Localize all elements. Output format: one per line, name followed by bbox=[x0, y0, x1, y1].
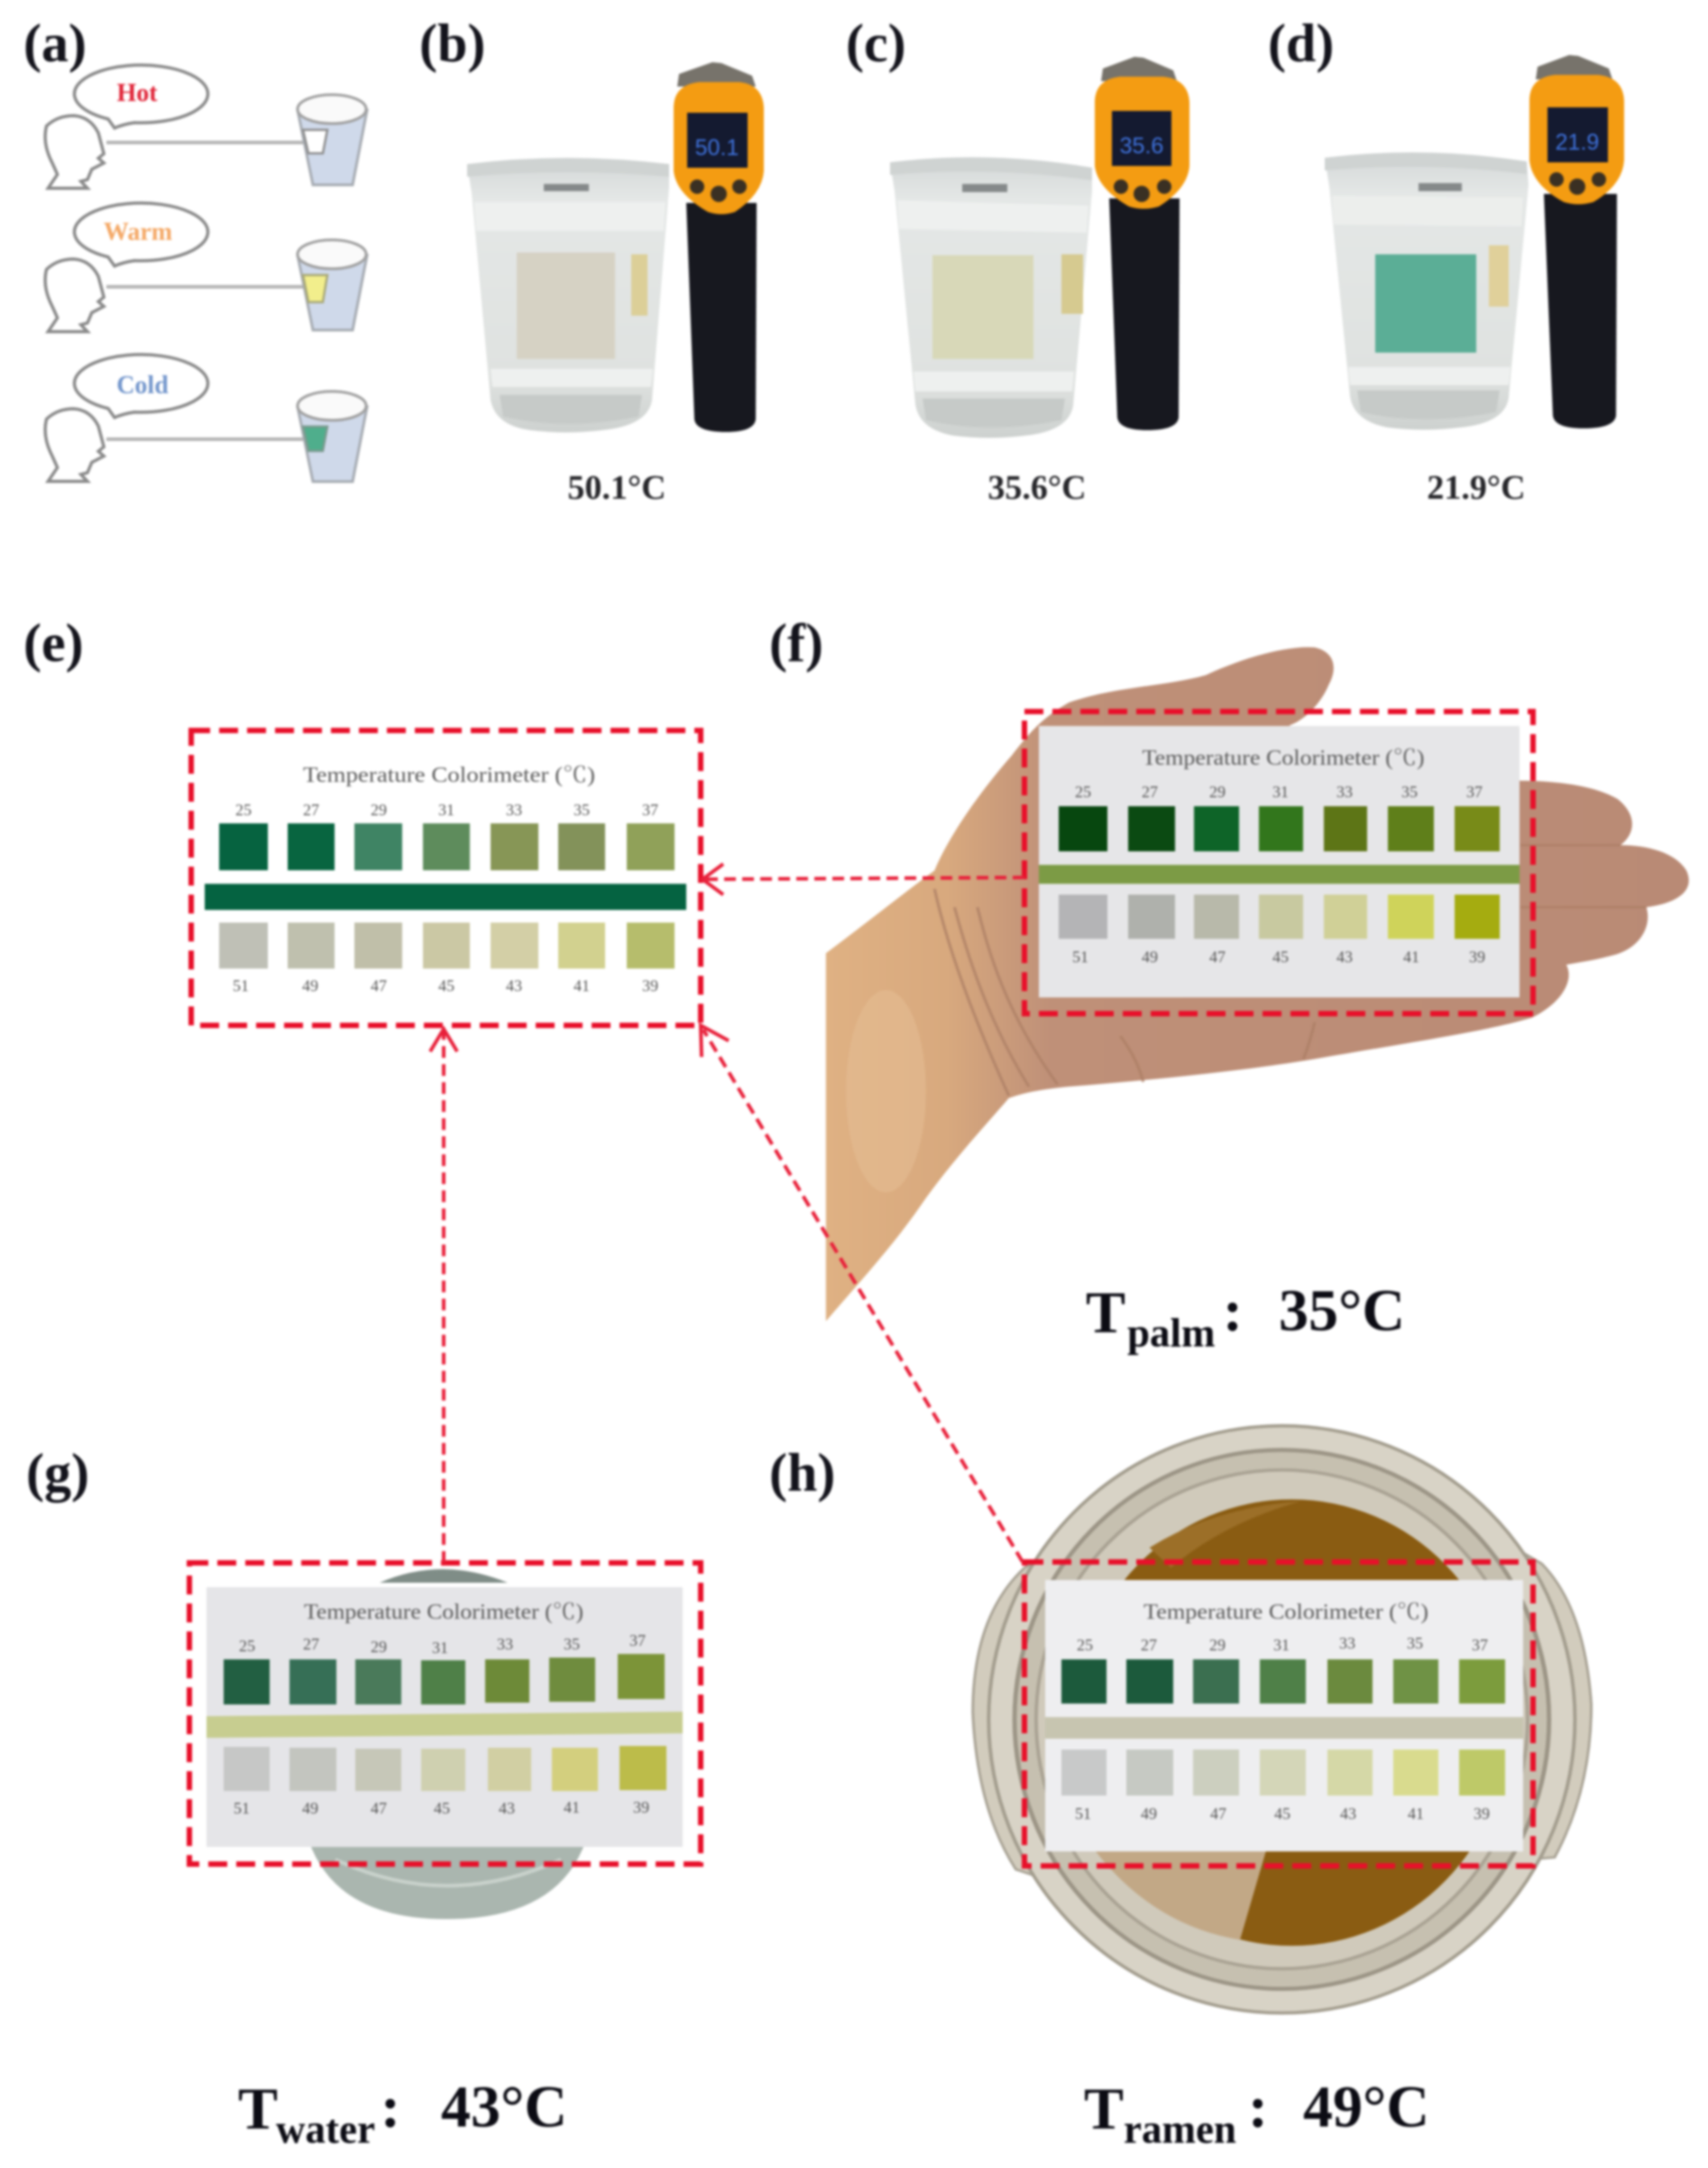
upper scale numbers bbox=[1075, 783, 1483, 801]
upper scale numbers: 29 bbox=[371, 801, 387, 819]
beaker with sensor card bbox=[890, 157, 1092, 438]
lower scale numbers: 49 bbox=[302, 1799, 318, 1817]
indicator strip bbox=[205, 884, 686, 910]
upper scale numbers bbox=[1077, 1634, 1488, 1654]
reading: ramen temperature: T bbox=[1084, 2076, 1124, 2142]
reading: water temperature: 43°C bbox=[441, 2074, 567, 2140]
temperature reading: 21.9°C bbox=[1427, 469, 1526, 507]
lower scale numbers: 41 bbox=[1403, 948, 1419, 966]
word: cold: Cold bbox=[116, 372, 169, 400]
photo: ramen bowl bbox=[973, 1426, 1592, 2013]
row: cold bbox=[45, 354, 367, 482]
upper scale numbers: 25 bbox=[1077, 1636, 1093, 1654]
upper scale numbers: 33 bbox=[506, 801, 522, 819]
indicator strip bbox=[1045, 1717, 1523, 1739]
dashed highlight box bbox=[1024, 712, 1533, 1014]
upper scale numbers: 25 bbox=[235, 801, 252, 819]
upper colour swatches bbox=[219, 823, 675, 870]
upper scale numbers: 27 bbox=[1141, 1636, 1157, 1654]
speech bubble: warm bbox=[75, 203, 208, 266]
upper scale numbers: 27 bbox=[303, 801, 319, 819]
lower scale numbers: 45 bbox=[434, 1799, 450, 1817]
lower scale numbers: 43 bbox=[506, 977, 522, 995]
temperature reading: 35.6°C bbox=[987, 469, 1087, 507]
dashed highlight box bbox=[1024, 1562, 1533, 1866]
upper scale numbers: 25 bbox=[1075, 783, 1091, 801]
lower scale numbers: 43 bbox=[1336, 948, 1353, 966]
lower scale numbers: 47 bbox=[1209, 948, 1226, 966]
lower scale numbers: 39 bbox=[642, 977, 658, 995]
upper scale numbers: 27 bbox=[303, 1635, 319, 1653]
upper scale numbers bbox=[239, 1631, 646, 1657]
label a: (a) bbox=[23, 14, 87, 73]
lower scale numbers bbox=[1075, 1805, 1490, 1823]
reading: ramen temperature: ramen bbox=[1124, 2107, 1236, 2152]
icon: cup with green swatch bbox=[298, 391, 367, 482]
arrow: ramen card to reference card bbox=[701, 1025, 1023, 1562]
word: hot: Hot bbox=[116, 79, 158, 107]
lower colour swatches bbox=[224, 1746, 666, 1791]
connecting line bbox=[106, 285, 303, 289]
card title: Temperature Colorimeter (℃) bbox=[1143, 1601, 1428, 1624]
lower scale numbers: 47 bbox=[371, 977, 387, 995]
upper scale numbers: 29 bbox=[1209, 1636, 1226, 1654]
upper scale numbers: 33 bbox=[1339, 1634, 1355, 1652]
icon: cup with yellow swatch bbox=[298, 240, 367, 330]
reading: palm temperature: palm bbox=[1127, 1310, 1216, 1355]
lower scale numbers: 45 bbox=[438, 977, 455, 995]
infrared thermometer: 35.6 bbox=[1120, 133, 1163, 159]
lower scale numbers bbox=[233, 977, 658, 995]
dashed highlight box bbox=[191, 730, 701, 1025]
photo: water dish bbox=[308, 1569, 586, 1919]
upper scale numbers: 35 bbox=[1401, 783, 1418, 801]
arrow: water card to reference card bbox=[430, 1029, 457, 1563]
infrared thermometer: 50.1 bbox=[695, 135, 739, 161]
upper scale numbers: 29 bbox=[1209, 783, 1226, 801]
arrow: palm card to reference card bbox=[702, 864, 1024, 895]
upper scale numbers: 25 bbox=[239, 1637, 255, 1655]
upper scale numbers bbox=[235, 801, 658, 819]
reading: palm temperature: T bbox=[1086, 1280, 1125, 1346]
reading: water temperature: water bbox=[276, 2107, 375, 2152]
beaker with sensor card bbox=[467, 158, 669, 433]
word: warm: Warm bbox=[104, 218, 172, 246]
upper scale numbers: 33 bbox=[1336, 783, 1353, 801]
reading: palm temperature bbox=[1086, 1278, 1405, 1355]
lower scale numbers: 47 bbox=[371, 1799, 387, 1817]
panel h: card on ramen bowl bbox=[769, 1426, 1592, 2152]
lower scale numbers bbox=[1072, 948, 1485, 966]
lower scale numbers: 41 bbox=[1408, 1805, 1424, 1823]
colorimeter card bbox=[1045, 1580, 1523, 1851]
icon: cup with blank swatch bbox=[298, 95, 367, 185]
upper scale numbers: 27 bbox=[1142, 783, 1158, 801]
icon: head bbox=[45, 409, 104, 482]
upper scale numbers: 37 bbox=[1466, 783, 1483, 801]
upper scale numbers: 37 bbox=[1472, 1636, 1488, 1654]
lower scale numbers: 43 bbox=[1340, 1805, 1356, 1823]
card title: Temperature Colorimeter (℃) bbox=[304, 1601, 583, 1624]
row: warm bbox=[45, 203, 367, 332]
lower colour swatches bbox=[1059, 895, 1500, 939]
connecting line bbox=[106, 141, 303, 144]
temperature reading: 50.1°C bbox=[567, 469, 666, 507]
label d: (d) bbox=[1268, 14, 1334, 73]
indicator strip bbox=[1039, 865, 1520, 884]
colorimeter card bbox=[207, 1587, 683, 1847]
icon: head bbox=[45, 259, 104, 332]
upper scale numbers: 37 bbox=[642, 801, 658, 819]
lower colour swatches bbox=[219, 923, 675, 969]
photo: hand bbox=[826, 648, 1689, 1321]
lower scale numbers: 45 bbox=[1274, 1805, 1290, 1823]
reading: water temperature bbox=[238, 2074, 567, 2152]
upper scale numbers: 29 bbox=[371, 1638, 387, 1656]
label h: (h) bbox=[769, 1443, 835, 1502]
colorimeter card bbox=[1039, 726, 1520, 997]
upper scale numbers: 31 bbox=[1272, 783, 1289, 801]
panel g: card on water dish bbox=[26, 1443, 701, 2152]
upper scale numbers: 35 bbox=[1407, 1634, 1423, 1652]
lower scale numbers: 43 bbox=[499, 1799, 515, 1817]
speech bubble: hot bbox=[75, 65, 208, 128]
reading: ramen temperature: : bbox=[1248, 2074, 1268, 2140]
reading: water temperature: : bbox=[381, 2074, 400, 2140]
infrared thermometer: 21.9 bbox=[1556, 130, 1599, 155]
upper scale numbers: 31 bbox=[1273, 1636, 1290, 1654]
reading: palm temperature: 35°C bbox=[1279, 1278, 1405, 1344]
infrared thermometer bbox=[674, 62, 764, 432]
lower scale numbers: 49 bbox=[1141, 1805, 1157, 1823]
lower scale numbers: 39 bbox=[1469, 948, 1485, 966]
upper colour swatches bbox=[224, 1654, 665, 1704]
reading: ramen temperature bbox=[1084, 2074, 1429, 2152]
upper colour swatches bbox=[1061, 1659, 1505, 1704]
panel a: perception of hot, warm and cold cups bbox=[23, 14, 367, 482]
upper scale numbers: 35 bbox=[574, 801, 590, 819]
lower scale numbers: 49 bbox=[302, 977, 318, 995]
lower scale numbers: 45 bbox=[1272, 948, 1289, 966]
upper scale numbers: 31 bbox=[438, 801, 455, 819]
lower scale numbers: 51 bbox=[233, 977, 249, 995]
lower colour swatches bbox=[1061, 1750, 1505, 1796]
indicator strip bbox=[207, 1712, 683, 1738]
label c: (c) bbox=[846, 14, 906, 73]
dashed highlight box bbox=[189, 1563, 701, 1864]
upper scale numbers: 33 bbox=[497, 1635, 513, 1653]
reading: ramen temperature: 49°C bbox=[1303, 2074, 1429, 2140]
lower scale numbers: 49 bbox=[1142, 948, 1158, 966]
connecting line bbox=[106, 437, 303, 441]
lower scale numbers: 41 bbox=[564, 1798, 580, 1816]
panel b: beaker and thermometer at 50.1 C bbox=[419, 14, 764, 507]
panel f: card on palm bbox=[769, 613, 1689, 1355]
lower scale numbers: 51 bbox=[1072, 948, 1088, 966]
row: hot bbox=[45, 65, 367, 188]
lower scale numbers: 39 bbox=[1474, 1805, 1490, 1823]
icon: head bbox=[45, 115, 104, 188]
speech bubble: cold bbox=[75, 354, 208, 418]
reading: palm temperature: : bbox=[1223, 1278, 1243, 1344]
panel c: beaker and thermometer at 35.6 C bbox=[846, 14, 1189, 507]
reading: water temperature: T bbox=[238, 2076, 278, 2142]
infrared thermometer bbox=[1095, 57, 1189, 430]
card title: Temperature Colorimeter (℃) bbox=[303, 764, 595, 787]
label b: (b) bbox=[419, 14, 485, 73]
label g: (g) bbox=[26, 1443, 89, 1502]
label e: (e) bbox=[23, 613, 84, 673]
beaker with sensor card bbox=[1325, 152, 1529, 429]
lower scale numbers: 51 bbox=[1075, 1805, 1091, 1823]
infrared thermometer bbox=[1529, 55, 1624, 428]
lower scale numbers: 47 bbox=[1210, 1805, 1226, 1823]
card title: Temperature Colorimeter (℃) bbox=[1142, 747, 1425, 770]
lower scale numbers: 41 bbox=[574, 977, 590, 995]
upper scale numbers: 37 bbox=[629, 1631, 646, 1649]
lower scale numbers: 39 bbox=[633, 1798, 649, 1816]
panel d: beaker and thermometer at 21.9 C bbox=[1268, 14, 1624, 507]
lower scale numbers bbox=[234, 1798, 649, 1817]
lower scale numbers: 51 bbox=[234, 1799, 250, 1817]
panel e: reference colorimeter card bbox=[23, 613, 701, 1025]
upper scale numbers: 31 bbox=[432, 1639, 448, 1657]
label f: (f) bbox=[769, 613, 823, 673]
upper colour swatches bbox=[1059, 806, 1500, 851]
upper scale numbers: 35 bbox=[564, 1635, 580, 1653]
